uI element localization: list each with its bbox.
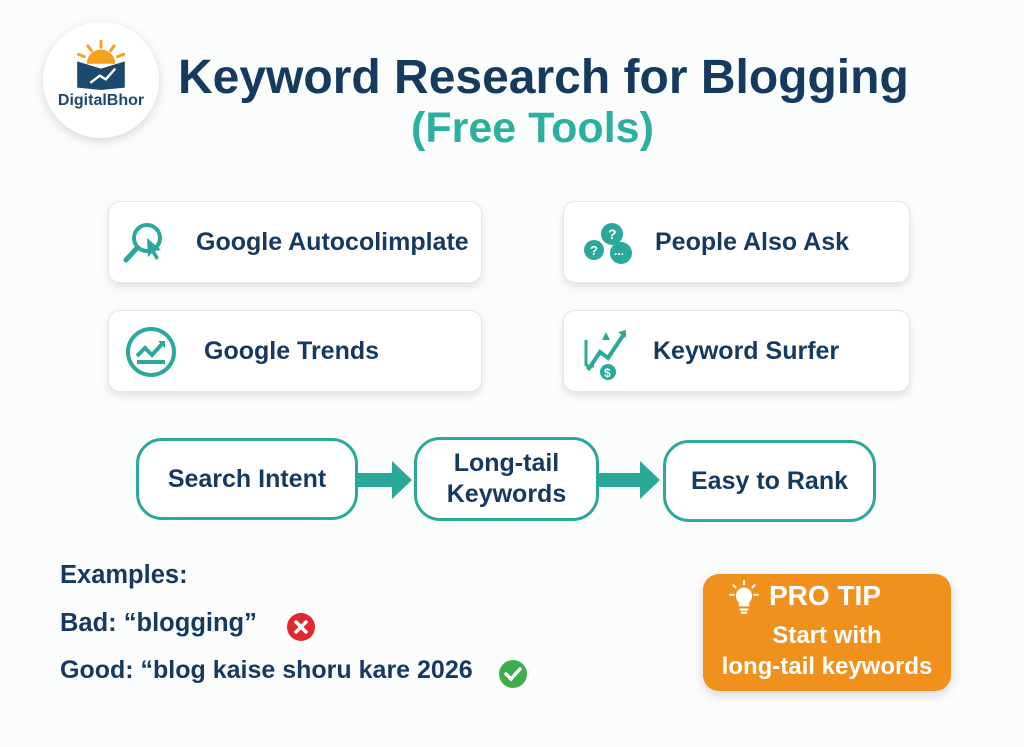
arrow 2 — [599, 461, 660, 499]
icon: logo book with sun — [76, 40, 126, 90]
card: Google Trends — [108, 310, 482, 392]
icon: growth chart dollar — [584, 330, 626, 380]
card: Keyword Surfer: Keyword Surfer — [653, 336, 839, 364]
pro tip callout — [703, 574, 951, 691]
subtitle: (Free Tools) — [411, 104, 654, 152]
flow: Easy to Rank — [663, 440, 876, 522]
flow: Search Intent — [136, 438, 358, 520]
icon: speech bubbles: ? — [608, 226, 617, 242]
pro tip text: long-tail keywords — [722, 653, 932, 680]
card: Google Autocomplete: Google Autocolimplate — [196, 228, 469, 256]
icon: red x — [287, 613, 315, 641]
bad example — [60, 609, 315, 641]
title: Keyword Research for Blogging — [178, 51, 909, 104]
flow: Long-tail Keywords: Keywords — [447, 480, 566, 508]
icon: magnifier cursor — [124, 223, 162, 262]
icon: trend circle — [126, 327, 176, 377]
icon: light bulb — [729, 580, 759, 614]
pro tip text: Start with — [772, 622, 882, 649]
bad example: Bad: “blogging” — [60, 609, 257, 637]
icon: speech bubbles — [584, 223, 632, 264]
card: People Also Ask — [563, 201, 910, 283]
icon: speech bubbles: ... — [614, 244, 624, 258]
pro tip heading: PRO TIP — [769, 580, 881, 611]
card: Google Trends: Google Trends — [204, 336, 379, 364]
examples heading: Examples: — [60, 561, 188, 589]
flow: Long-tail Keywords — [414, 437, 599, 521]
pro tip text — [722, 622, 932, 680]
icon: speech bubbles: ? — [590, 243, 598, 258]
arrow 1 — [358, 461, 412, 499]
icon: growth chart dollar: $ — [604, 366, 611, 380]
examples block — [60, 561, 527, 688]
card: People Also Ask: People Also Ask — [655, 228, 849, 256]
title — [178, 51, 909, 152]
logo badge — [43, 22, 159, 138]
icon: green check — [499, 660, 527, 688]
flow: Easy to Rank: Easy to Rank — [691, 466, 848, 494]
card: Google Autocomplete — [108, 201, 482, 283]
good example: Good: “blog kaise shoru kare 2026 — [60, 656, 473, 684]
flow: Long-tail Keywords: Long-tail — [454, 449, 559, 477]
flow: Search Intent: Search Intent — [168, 464, 326, 492]
logo text: DigitalBhor — [58, 92, 144, 109]
card: Keyword Surfer — [563, 310, 910, 392]
